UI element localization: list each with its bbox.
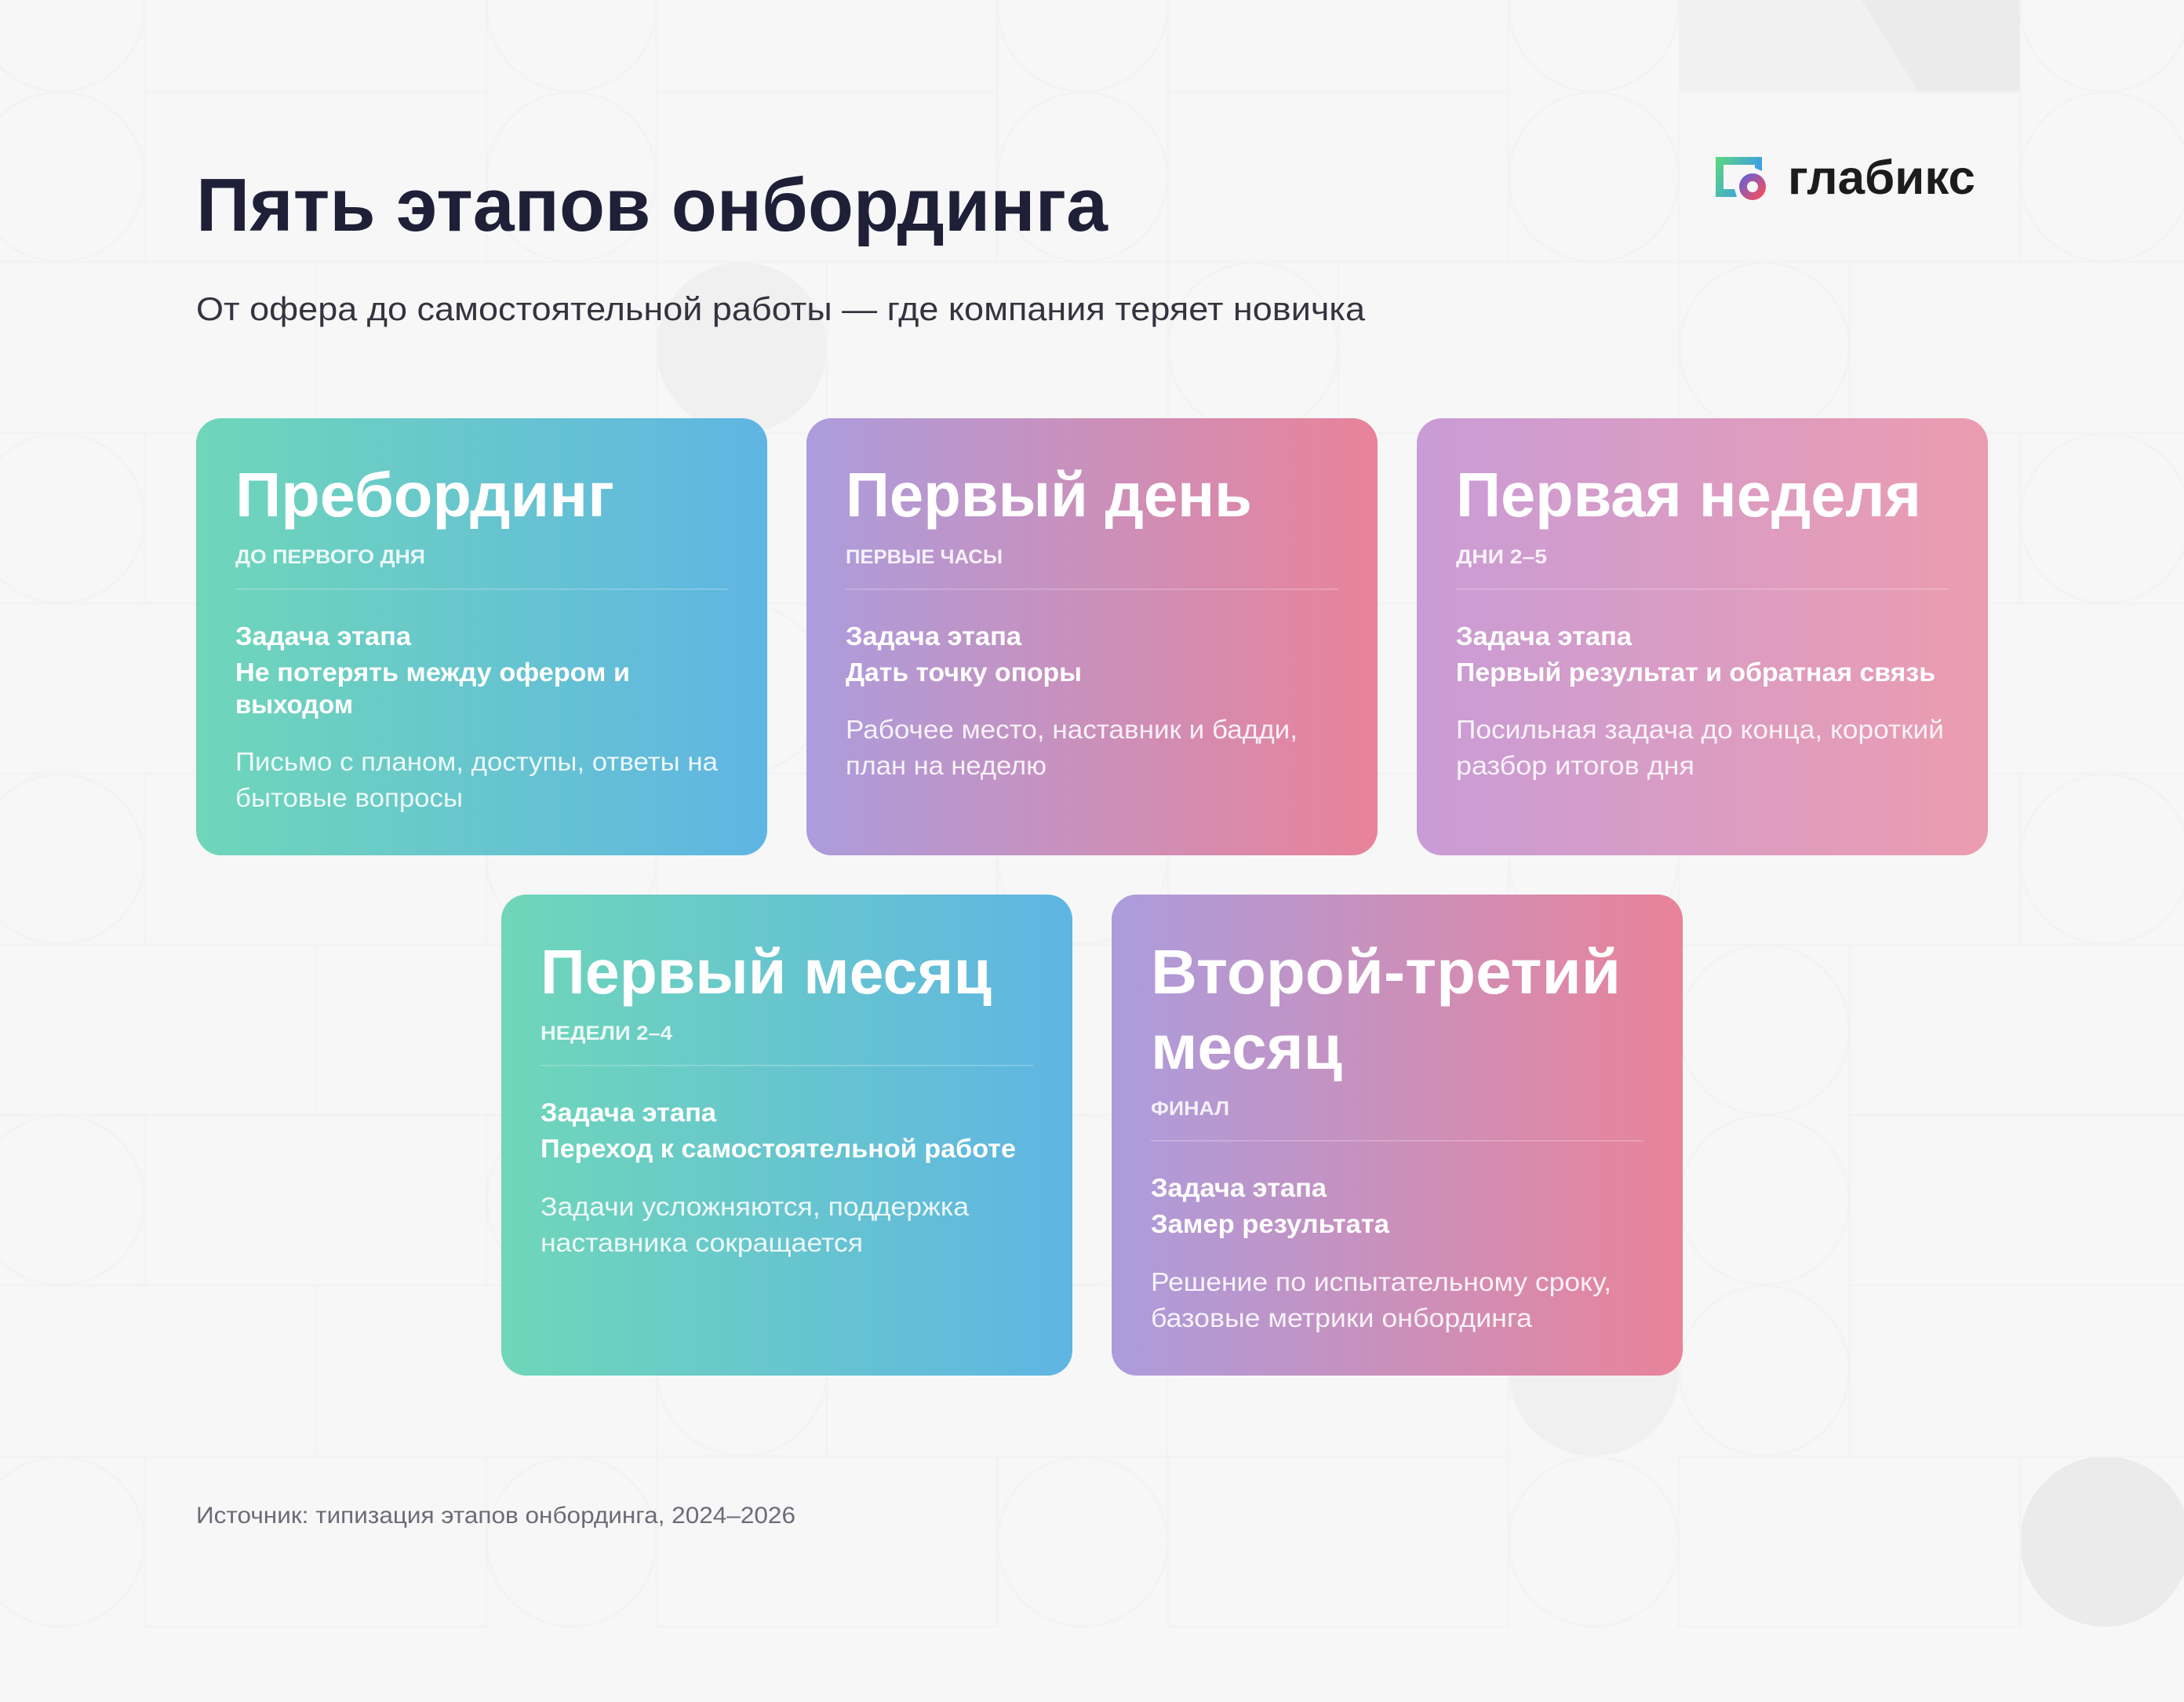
stage task — [235, 621, 630, 719]
source footnote: Источник: типизация этапов онбординга, 2024–2026 — [196, 1503, 795, 1529]
stage heading — [1151, 937, 1621, 1082]
stage description — [846, 715, 1298, 780]
stage task: выходом — [235, 690, 353, 719]
stage description — [1151, 1267, 1611, 1332]
stage task: Не потерять между офером и — [235, 658, 630, 687]
stage task: Задача этапа — [1456, 621, 1633, 651]
stage description: план на неделю — [846, 751, 1046, 780]
stage period: ФИНАЛ — [1151, 1098, 1229, 1120]
stage task: Замер результата — [1151, 1209, 1390, 1238]
title: Пять этапов онбординга — [196, 163, 1108, 247]
logo wordmark: глабикс — [1788, 151, 1975, 204]
odd rows r0 r1 r3 r5 r7 r9 — [0, 0, 144, 91]
stage description: бытовые вопросы — [235, 783, 463, 812]
stage description: Рабочее место, наставник и бадди, — [846, 715, 1298, 744]
stage task: Задача этапа — [1151, 1173, 1327, 1202]
stage heading: Первая неделя — [1456, 460, 1921, 530]
panel: Пребординг — [196, 418, 767, 855]
panel: Второй-третий месяц — [1112, 895, 1683, 1376]
stage description: Посильная задача до конца, короткий — [1456, 715, 1944, 744]
stage description: Решение по испытательному сроку, — [1151, 1267, 1611, 1296]
logo — [1716, 151, 1975, 204]
stage task: Первый результат и обратная связь — [1456, 658, 1935, 687]
panel: Первая неделя — [1417, 418, 1988, 855]
stage description — [541, 1192, 970, 1257]
stage task: Дать точку опоры — [846, 658, 1082, 687]
subtitle: От офера до самостоятельной работы — где компания теряет новичка — [196, 290, 1366, 327]
stage description: базовые метрики онбординга — [1151, 1303, 1533, 1332]
stage period: ДО ПЕРВОГО ДНЯ — [235, 546, 425, 568]
panel: Первый месяц — [501, 895, 1072, 1376]
stage task: Задача этапа — [846, 621, 1022, 651]
panel: Первый день — [806, 418, 1378, 855]
icon: logo mark — [1716, 157, 1762, 197]
stage description — [235, 747, 719, 812]
stage task — [846, 621, 1082, 687]
stage heading: месяц — [1151, 1012, 1342, 1082]
stage task — [541, 1098, 1016, 1163]
stage heading: Первый день — [846, 460, 1252, 530]
even rows r2 r4 r6 r8 — [0, 262, 316, 433]
stage period: НЕДЕЛИ 2–4 — [541, 1022, 672, 1044]
stage heading: Пребординг — [235, 460, 614, 530]
stage description: наставника сокращается — [541, 1228, 863, 1257]
stage task — [1151, 1173, 1390, 1238]
stage description: Задачи усложняются, поддержка — [541, 1192, 970, 1221]
stage task: Задача этапа — [541, 1098, 717, 1127]
stage task — [1456, 621, 1935, 687]
stage task: Задача этапа — [235, 621, 412, 651]
stage period: ПЕРВЫЕ ЧАСЫ — [846, 546, 1003, 568]
stage period: ДНИ 2–5 — [1456, 546, 1547, 568]
stage description — [1456, 715, 1944, 780]
stage heading: Первый месяц — [541, 937, 992, 1007]
stage description: разбор итогов дня — [1456, 751, 1694, 780]
stage task: Переход к самостоятельной работе — [541, 1134, 1016, 1163]
stage description: Письмо с планом, доступы, ответы на — [235, 747, 719, 776]
stage heading: Второй-третий — [1151, 937, 1621, 1007]
